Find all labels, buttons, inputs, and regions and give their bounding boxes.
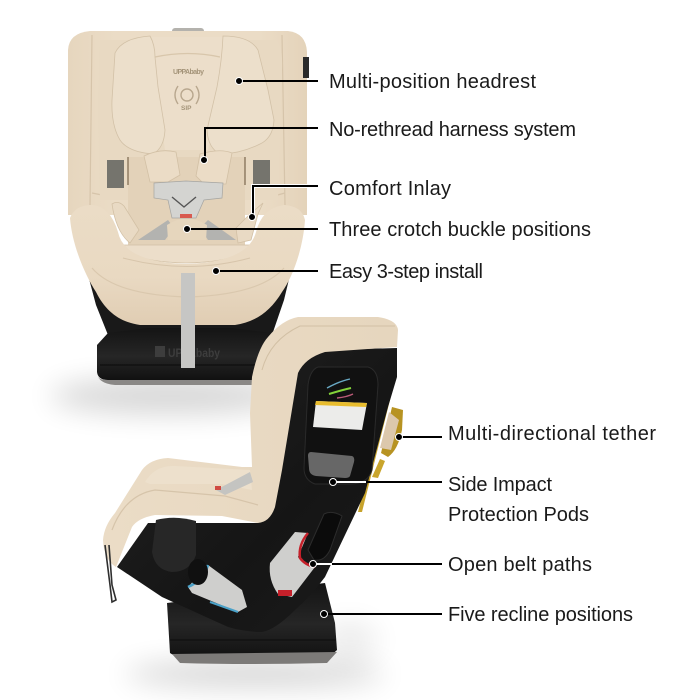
buckle red tab — [215, 486, 221, 490]
label: Three crotch buckle positions — [329, 219, 591, 241]
recess panel — [304, 367, 378, 484]
callout: Five recline positions — [320, 604, 633, 626]
side tag — [303, 57, 309, 78]
callout: Multi-position headrest — [236, 71, 536, 93]
beige padding — [103, 317, 398, 567]
crotch pad — [167, 218, 207, 240]
label line 1: Side Impact — [448, 474, 552, 496]
red belt sticker — [270, 532, 315, 597]
seat opening — [128, 157, 245, 245]
comfort inlay right — [236, 203, 263, 243]
SIP label: SIP — [181, 105, 192, 112]
warning label — [313, 401, 367, 430]
callout: Multi-directional tether — [396, 423, 656, 445]
blue belt sticker — [188, 565, 247, 612]
label: Multi-position headrest — [329, 71, 536, 93]
shadow: right of base — [322, 622, 378, 658]
wing panels — [98, 40, 282, 200]
belt lock dock — [152, 518, 196, 572]
side buckle — [216, 472, 253, 495]
backrest — [68, 31, 307, 215]
harness label left — [107, 160, 124, 188]
shadow: front seat — [50, 378, 290, 414]
headrest right pad — [207, 36, 274, 154]
level indicator — [327, 379, 353, 398]
side view car seat — [103, 317, 403, 686]
base logo text: UPPAbaby — [168, 348, 221, 360]
callout: No-rethread harness system — [200, 119, 576, 164]
yellow rear strip — [358, 378, 395, 512]
label: Comfort Inlay — [329, 178, 451, 200]
tether beige panel — [380, 412, 399, 450]
callout: Three crotch buckle positions — [184, 219, 591, 241]
label: Multi-directional tether — [448, 423, 656, 445]
seat pad — [122, 245, 252, 263]
shadow: side seat — [125, 662, 385, 686]
black shell — [117, 348, 397, 632]
tether hook — [372, 459, 385, 478]
black lower shell — [88, 275, 290, 335]
seat well — [145, 466, 252, 490]
tether housing — [381, 407, 403, 457]
chest clip and buckle — [154, 181, 223, 218]
label: Open belt paths — [448, 554, 592, 576]
centre head panel — [152, 37, 224, 150]
open belt path — [308, 512, 342, 560]
headrest left pad — [112, 36, 165, 154]
headrest brand: UPPAbaby — [173, 69, 204, 76]
harness pads — [144, 151, 232, 184]
callout: Easy 3-step install — [212, 261, 483, 283]
front view car seat — [50, 28, 309, 414]
label: No-rethread harness system — [329, 119, 576, 141]
headrest top adjuster — [172, 28, 204, 34]
side base — [167, 583, 337, 664]
base — [97, 328, 272, 385]
SIP emblem — [173, 69, 204, 112]
harness label right — [253, 160, 270, 188]
callout: Side Impact Protection Pods — [330, 474, 589, 526]
cushion — [70, 205, 305, 325]
side impact pod — [308, 452, 354, 478]
comfort inlay left — [112, 202, 139, 243]
callout: Open belt paths — [310, 554, 592, 576]
label line 2: Protection Pods — [448, 504, 589, 526]
label: Five recline positions — [448, 604, 633, 626]
front strap side — [105, 545, 116, 602]
callout: Comfort Inlay — [248, 178, 451, 220]
label: Easy 3-step install — [329, 261, 483, 283]
gray belts — [138, 220, 236, 240]
front strap — [181, 273, 195, 368]
